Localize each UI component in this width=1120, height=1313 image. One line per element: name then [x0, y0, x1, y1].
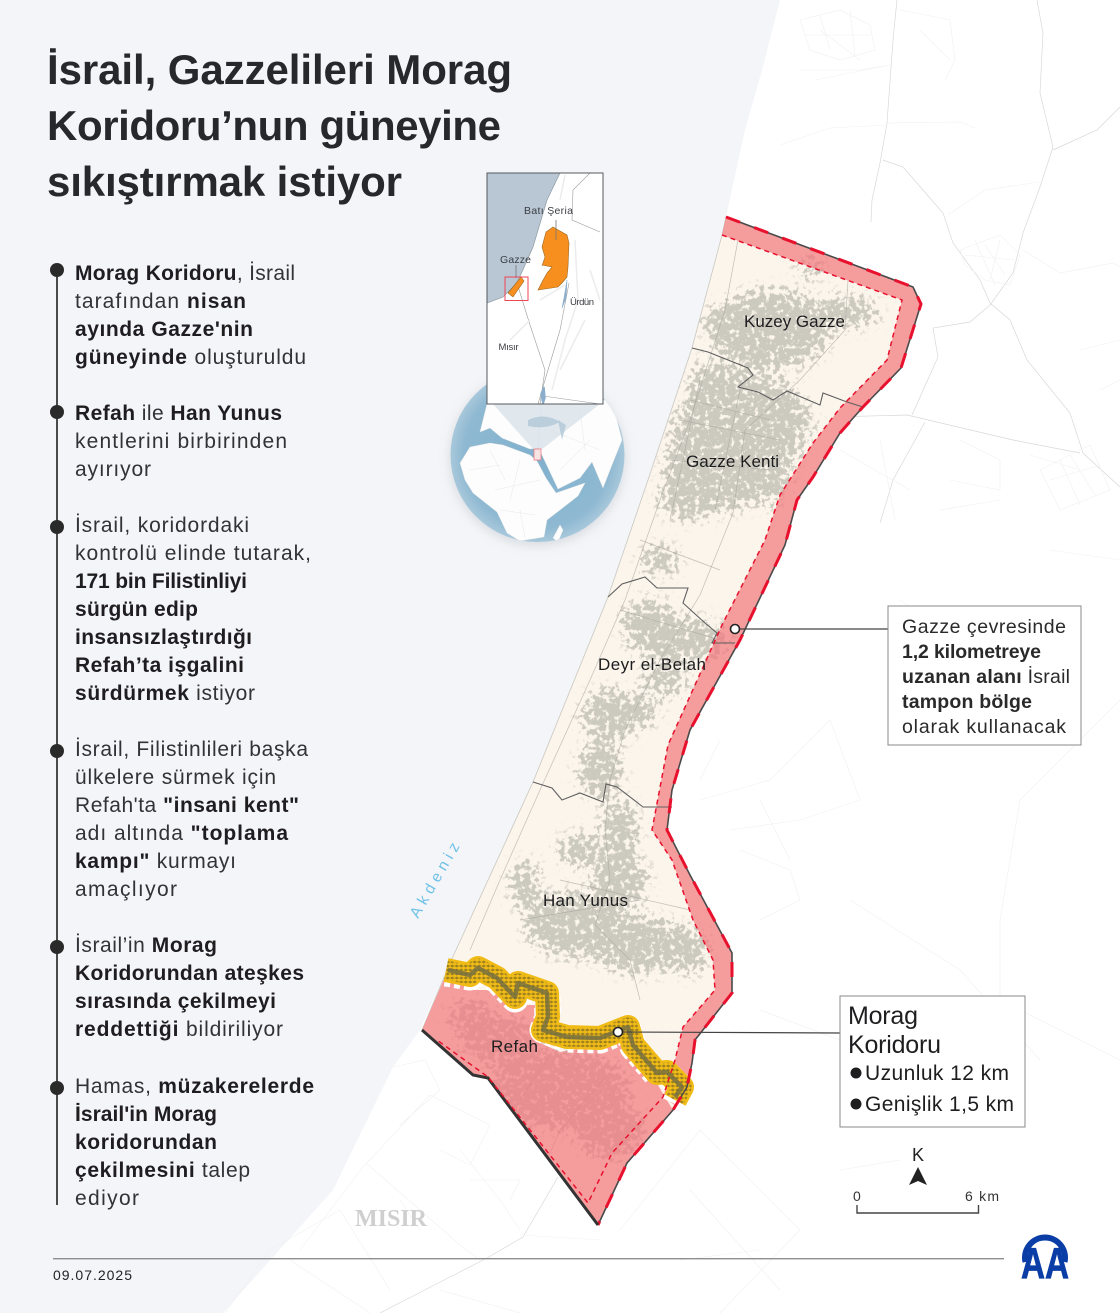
- text block: bullet 3: [75, 514, 311, 705]
- urban areas in Gaza: [448, 240, 879, 1200]
- West Bank: [538, 227, 569, 290]
- date: 09.07.2025: [53, 1267, 132, 1283]
- text block: bullet 3: İsrail, koridordaki: [75, 514, 249, 537]
- inset map: [487, 173, 603, 404]
- scale bar: 0: [853, 1188, 861, 1204]
- text block: bullet 2: [75, 402, 287, 481]
- leader lines on inset: [516, 220, 556, 278]
- text block: bullet 4: adı altında "toplama: [75, 822, 288, 845]
- text block: bullet 1: [75, 262, 306, 369]
- footer rule: [53, 1258, 1004, 1259]
- map labels: governorates: Deyr el-Belah: [598, 655, 706, 674]
- text block: bullet 5: İsrail’in Morag: [75, 934, 217, 957]
- text block: bullet 1: güneyinde oluşturuldu: [75, 346, 306, 369]
- text block: bullet 2: ayırıyor: [75, 458, 151, 481]
- text block: bullet 6: [75, 1075, 314, 1210]
- callout: buffer zone: tampon bölge: [902, 691, 1032, 713]
- text block: bullet 3: Refah’ta işgalini: [75, 654, 244, 677]
- inset labels: Ürdün: [570, 297, 594, 308]
- text block: bullet 6: ediyor: [75, 1187, 139, 1210]
- label: Akdeniz: Akdeniz: [407, 840, 463, 921]
- text block: bullet 3: sürgün edip: [75, 598, 198, 621]
- callout: Morag corridor: Genişlik 1,5 km: [865, 1093, 1014, 1116]
- text block: bullet 6: İsrail'in Morag: [75, 1103, 217, 1126]
- text block: bullet 2: Refah ile Han Yunus: [75, 402, 282, 425]
- text block: bullet 1: tarafından nisan: [75, 290, 246, 313]
- callout: Morag corridor: Morag: [848, 1002, 918, 1030]
- text block: bullet 5: [75, 934, 304, 1041]
- inset labels: Gazze: [500, 254, 531, 266]
- text block: bullet 4: İsrail, Filistinlileri başka: [75, 738, 308, 761]
- text block: bullet 4: kampı" kurmayı: [75, 850, 236, 873]
- text block: bullet 1: ayında Gazze'nin: [75, 318, 253, 341]
- callout: Morag corridor: Koridoru: [848, 1031, 941, 1059]
- Morag corridor: [446, 968, 682, 1104]
- road network: Israel side: [620, 0, 1120, 1313]
- inset labels: [498, 205, 594, 353]
- text block: bullet 6: çekilmesini talep: [75, 1159, 250, 1182]
- map labels: governorates: Han Yunus: [543, 891, 628, 910]
- road network: Egypt side: [225, 1060, 600, 1313]
- text block: bullet 4: Refah'ta "insani kent": [75, 794, 299, 817]
- title: [47, 46, 512, 205]
- Gaza Strip base land: [422, 217, 921, 1225]
- text block: bullet 3: sürdürmek istiyor: [75, 682, 255, 705]
- text block: bullet 3: kontrolü elinde tutarak,: [75, 542, 311, 565]
- red locator rectangle: [505, 277, 528, 300]
- inset labels: Batı Şeria: [524, 205, 573, 217]
- map labels: governorates: Kuzey Gazze: [744, 312, 845, 331]
- title: sıkıştırmak istiyor: [47, 158, 402, 205]
- text block: bullet 3: 171 bin Filistinliyi: [75, 570, 247, 593]
- district borders: [533, 348, 863, 807]
- sea: Mediterranean: [0, 0, 780, 1313]
- text block: bullet 6: Hamas, müzakerelerde: [75, 1075, 314, 1098]
- scale bar: [853, 1188, 999, 1213]
- buffer zone: pink strip: [652, 217, 921, 1106]
- text block: bullet 4: [75, 738, 308, 901]
- callout: buffer zone: uzanan alanı İsrail: [902, 665, 1070, 688]
- callout: Morag corridor: Uzunluk 12 km: [865, 1062, 1009, 1085]
- text block: bullet 3: insansızlaştırdığı: [75, 626, 252, 649]
- Gaza Strip on inset: [508, 277, 524, 297]
- north arrow: [909, 1145, 927, 1185]
- title: İsrail, Gazzelileri Morag: [47, 46, 512, 93]
- callout: Morag corridor: [614, 996, 1025, 1127]
- title: Koridoru’nun güneyine: [47, 102, 501, 149]
- callout: buffer zone: Gazze çevresinde: [902, 616, 1066, 638]
- callout: buffer zone: [730, 606, 1081, 745]
- north arrow: K: [912, 1145, 924, 1165]
- text block: bullet 4: ülkelere sürmek için: [75, 766, 276, 789]
- timeline: [50, 263, 64, 1205]
- text block: bullet 6: koridorundan: [75, 1131, 217, 1154]
- scale bar: 6 km: [965, 1188, 999, 1204]
- map labels: governorates: [491, 312, 845, 1056]
- text block: bullet 5: reddettiği bildiriliyor: [75, 1018, 283, 1041]
- text block: bullet 1: Morag Koridoru, İsrail: [75, 262, 295, 285]
- callout: buffer zone: olarak kullanacak: [902, 716, 1066, 738]
- map labels: governorates: Refah: [491, 1037, 538, 1056]
- globe locator: [450, 368, 626, 546]
- text block: bullet 2: kentlerini birbirinden: [75, 430, 287, 453]
- text block: bullet 4: amaçlıyor: [75, 878, 177, 901]
- callout: buffer zone: 1,2 kilometreye: [902, 641, 1041, 663]
- map labels: governorates: Gazze Kenti: [686, 452, 779, 471]
- buffer zone boundaries: [422, 217, 921, 1225]
- text block: bullet 5: Koridorundan ateşkes: [75, 962, 304, 985]
- logo: AA: AA: [1021, 1239, 1069, 1288]
- inset labels: Mısır: [498, 342, 518, 353]
- label: MISIR: MISIR: [355, 1206, 428, 1232]
- text block: bullet 5: sırasında çekilmeyi: [75, 990, 276, 1013]
- Rafah occupied zone: [422, 972, 673, 1225]
